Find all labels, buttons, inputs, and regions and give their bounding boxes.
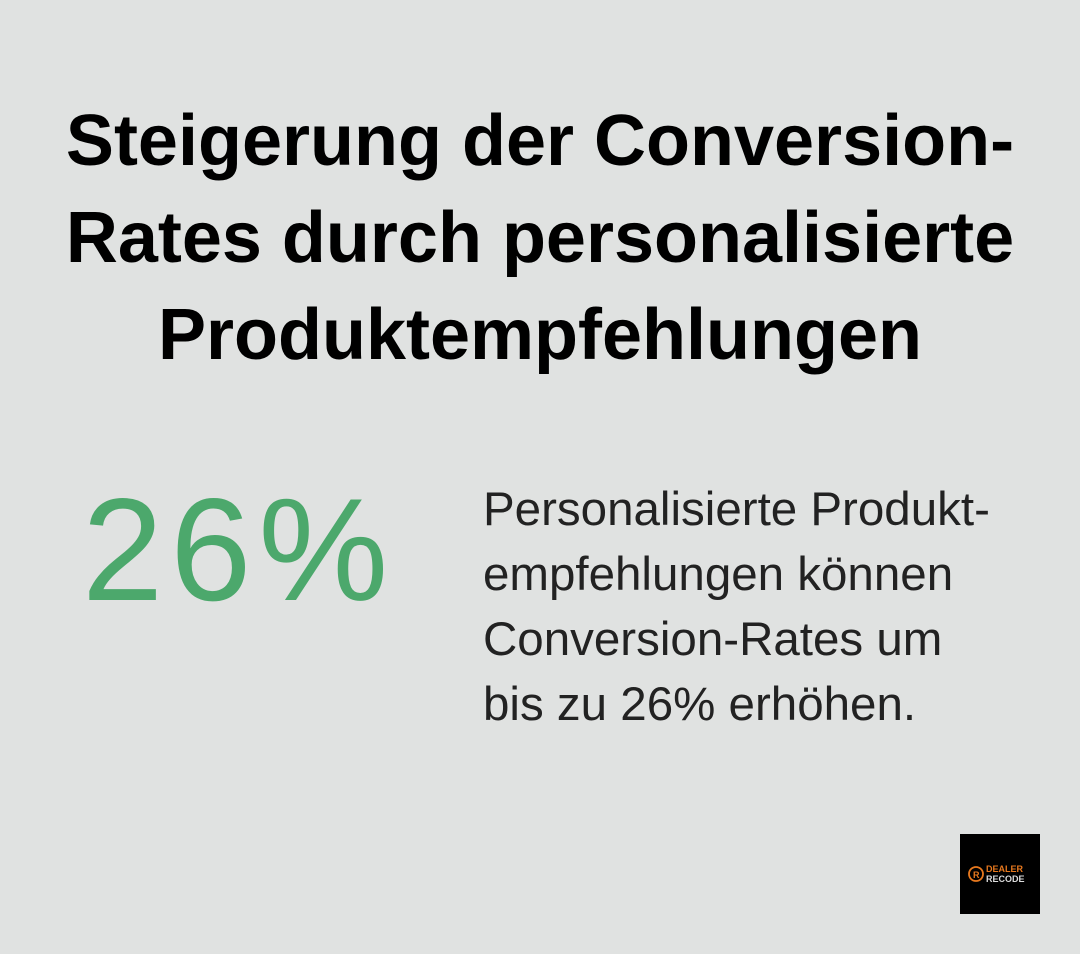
- description text: bis zu 26% erhöhen.: [483, 678, 916, 731]
- logo: Dealer Recode: RECODE: [986, 874, 1025, 884]
- logo: Dealer Recode: R: [973, 870, 980, 880]
- logo: Dealer Recode: DEALER: [986, 864, 1024, 874]
- big statistic: 26%: [82, 468, 395, 631]
- description text: Personalisierte Produkt-: [483, 483, 990, 536]
- logo: Dealer Recode: [960, 834, 1040, 914]
- title: Produktempfehlungen: [158, 295, 922, 375]
- description text: empfehlungen können: [483, 548, 953, 601]
- description text: [483, 483, 990, 731]
- title: [66, 101, 1014, 375]
- title: Steigerung der Conversion-: [66, 101, 1014, 181]
- title: Rates durch personalisierte: [66, 198, 1014, 278]
- description text: Conversion-Rates um: [483, 613, 942, 666]
